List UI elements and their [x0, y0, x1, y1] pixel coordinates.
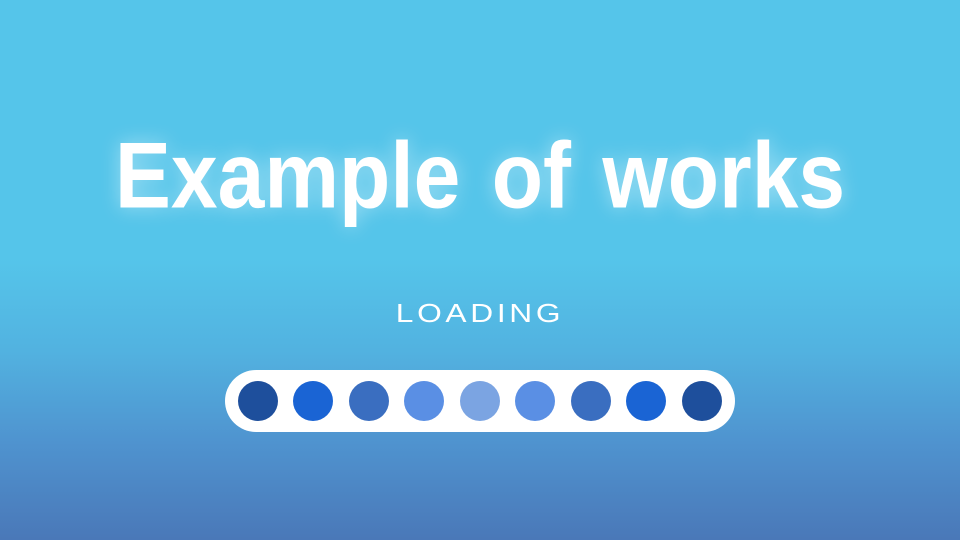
loading bar	[225, 370, 735, 432]
dot 1	[238, 381, 278, 421]
dot 3	[349, 381, 389, 421]
loading label: LOADING	[396, 298, 564, 328]
dot 8	[626, 381, 666, 421]
dot 9	[682, 381, 722, 421]
dot 4	[404, 381, 444, 421]
dot 6	[515, 381, 555, 421]
dot 7	[571, 381, 611, 421]
title: Example of works	[115, 122, 845, 228]
dot 5	[460, 381, 500, 421]
dot 2	[293, 381, 333, 421]
